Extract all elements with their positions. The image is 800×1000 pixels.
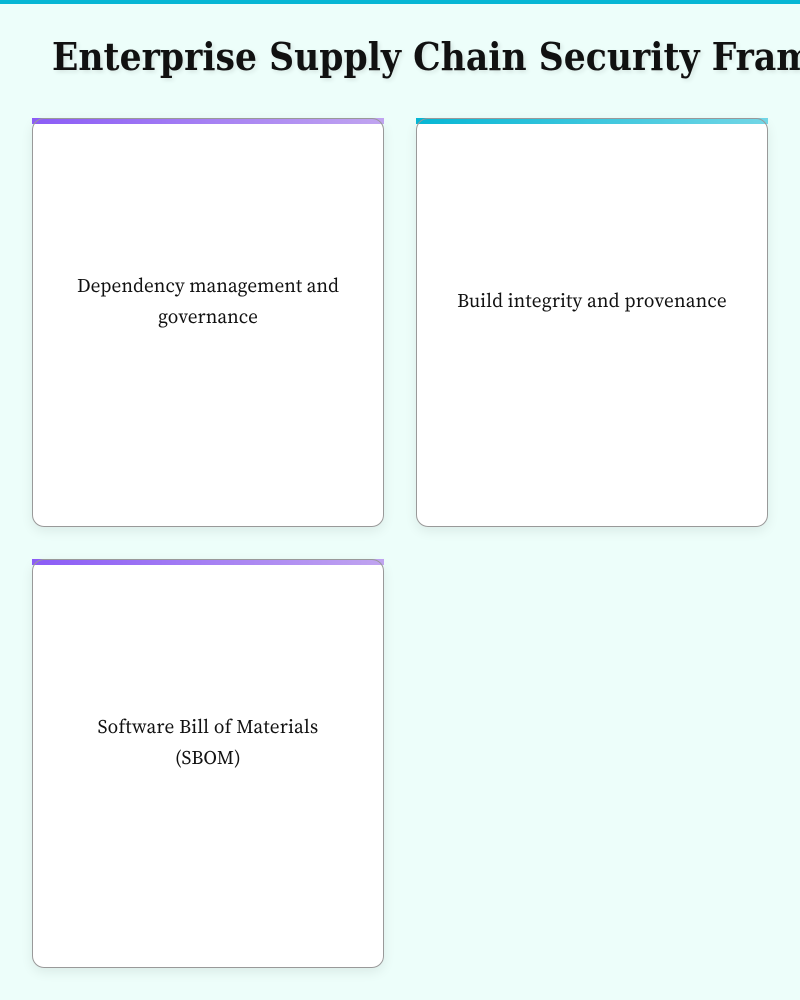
panel accent: cyan bar: [416, 118, 768, 124]
panel: dependency management: [32, 118, 384, 527]
panel accent: purple bar: [32, 118, 384, 124]
top accent bar: [0, 0, 800, 4]
panel: SBOM: [32, 559, 384, 968]
panel accent: purple bar: [32, 559, 384, 565]
text: build integrity: Build integrity and provenance: [457, 288, 727, 314]
text: dependency management: Dependency management and governance: [77, 273, 339, 330]
panel: build integrity: [416, 118, 768, 527]
text: SBOM: Software Bill of Materials (SBOM): [98, 714, 318, 771]
